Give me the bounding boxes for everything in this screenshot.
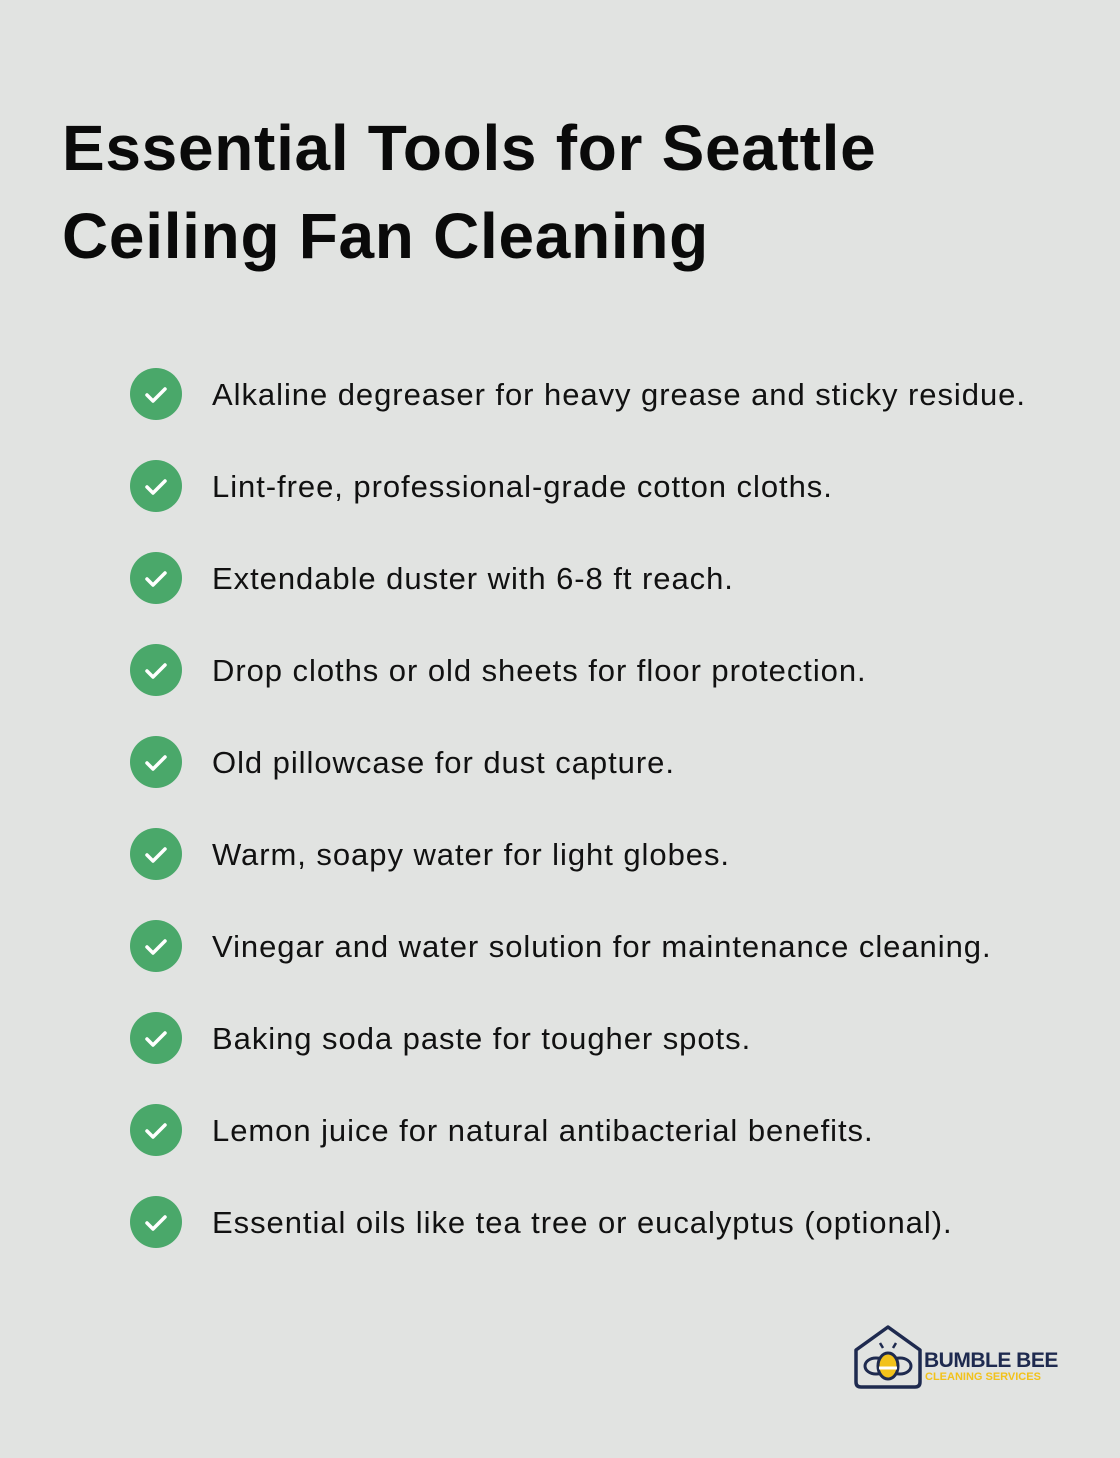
checklist <box>130 368 1026 1248</box>
item 8: Baking soda paste for tougher spots. <box>212 1021 751 1056</box>
item 10 <box>130 1196 953 1248</box>
title: Essential Tools for Seattle <box>62 112 876 184</box>
item 3 <box>130 552 734 604</box>
title: Ceiling Fan Cleaning <box>62 200 709 272</box>
item 2 <box>130 460 833 512</box>
item 7 <box>130 920 992 972</box>
logo: CLEANING SERVICES <box>925 1371 1041 1383</box>
item 4 <box>130 644 867 696</box>
logo text: BUMBLE BEE <box>924 1349 1058 1372</box>
item 5: Old pillowcase for dust capture. <box>212 745 675 780</box>
item 4: Drop cloths or old sheets for floor protection. <box>212 653 867 688</box>
item 9: Lemon juice for natural antibacterial benefits. <box>212 1113 874 1148</box>
item 7: Vinegar and water solution for maintenance cleaning. <box>212 929 992 964</box>
item 9 <box>130 1104 874 1156</box>
item 10: Essential oils like tea tree or eucalyptus (optional). <box>212 1205 953 1240</box>
icon: bee house <box>854 1325 922 1389</box>
item 8 <box>130 1012 751 1064</box>
item 6 <box>130 828 730 880</box>
item 1: Alkaline degreaser for heavy grease and sticky residue. <box>212 377 1026 412</box>
item 6: Warm, soapy water for light globes. <box>212 837 730 872</box>
item 1 <box>130 368 1026 420</box>
logo <box>854 1325 1058 1389</box>
item 5 <box>130 736 675 788</box>
item 3: Extendable duster with 6-8 ft reach. <box>212 561 734 596</box>
item 2: Lint-free, professional-grade cotton cloths. <box>212 469 833 504</box>
title <box>62 112 876 272</box>
